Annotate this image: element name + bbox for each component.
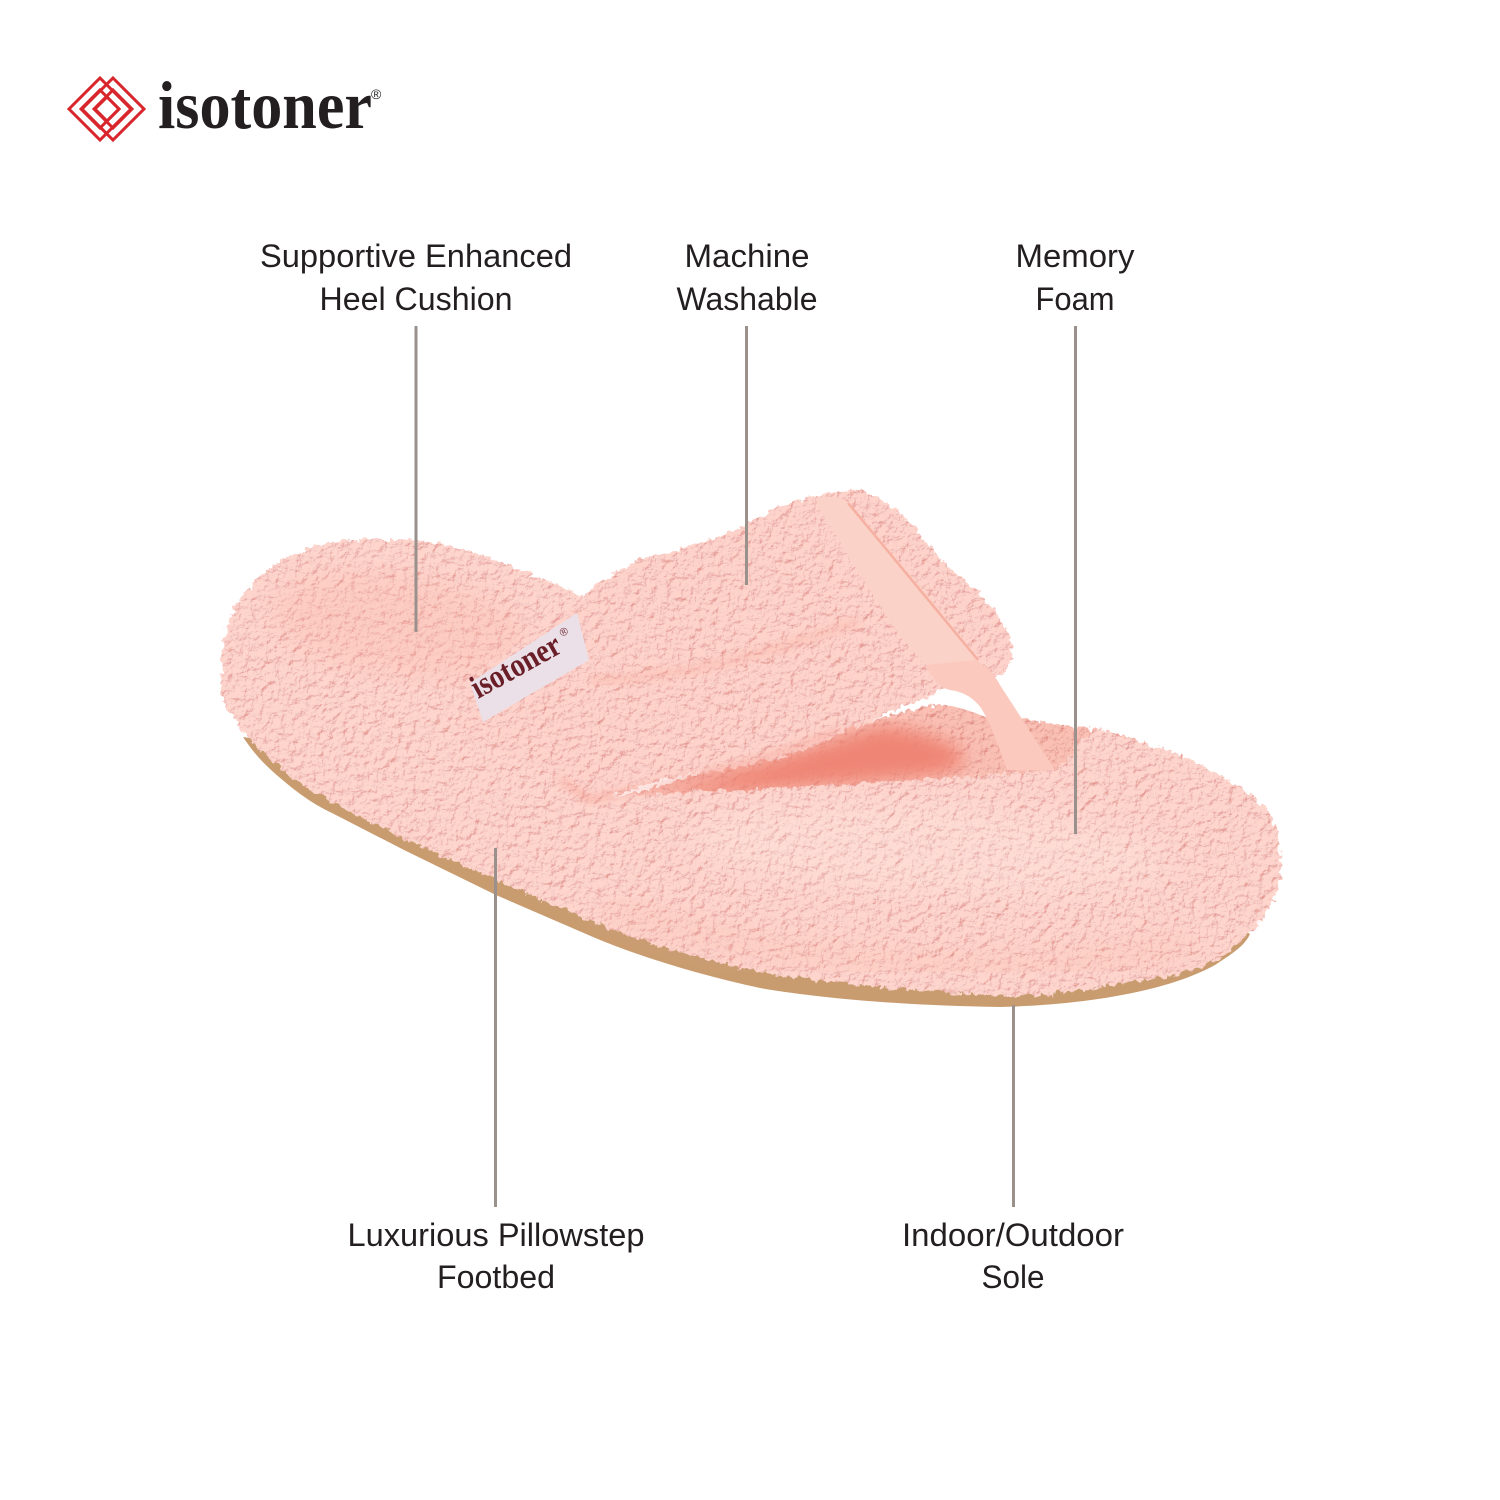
thong post: [926, 660, 1055, 770]
callout: luxurious pillowstep footbed: [348, 848, 644, 1295]
logo: isotoner: [69, 67, 382, 143]
label registered mark: ®: [558, 625, 571, 640]
rear forefoot rim: [570, 704, 1170, 830]
slipper illustration: [221, 490, 1281, 1007]
inner footbed behind strap: [570, 680, 1170, 830]
callout: machine washable: [676, 238, 818, 585]
white gap through the thong: [925, 680, 990, 719]
heel cup tint: [264, 557, 536, 693]
strap crease: [590, 620, 860, 680]
leader line: [745, 326, 748, 585]
deep shadow under strap: [650, 726, 965, 795]
callout: supportive enhanced heel cushion: [260, 238, 572, 632]
icon: red nested diamonds: [69, 78, 144, 140]
label text: Sole: [982, 1259, 1044, 1295]
leader line: [1074, 326, 1077, 834]
strap lower edge shade: [560, 730, 840, 800]
label text: isotoner: [464, 627, 568, 706]
label text: Washable: [676, 281, 818, 317]
side lower shade: [600, 905, 1190, 966]
label text: Footbed: [437, 1259, 555, 1295]
sole: [243, 737, 1250, 1007]
fabric strap band: [815, 497, 984, 668]
registered mark: ®: [371, 86, 382, 102]
label text: Foam: [1036, 281, 1114, 317]
fuzzy strap: [450, 490, 1012, 802]
label text: Memory: [1016, 238, 1134, 274]
leader line: [1012, 1005, 1015, 1207]
callout: memory foam: [1016, 238, 1134, 834]
label text: Machine: [684, 238, 810, 274]
callout: indoor/outdoor sole: [902, 1005, 1124, 1295]
label text: Supportive Enhanced: [260, 238, 572, 274]
leader line: [494, 848, 497, 1207]
leader line: [414, 326, 418, 632]
label text: Heel Cushion: [320, 281, 512, 317]
toe highlight: [688, 793, 1172, 907]
label text: Luxurious Pillowstep: [348, 1217, 644, 1253]
label tag: [470, 613, 589, 722]
label text: Indoor/Outdoor: [902, 1217, 1124, 1253]
fabric band edge seam: [848, 503, 978, 660]
footbed: [221, 540, 1281, 995]
wordmark: isotoner: [158, 67, 372, 143]
woven label: [464, 613, 589, 722]
